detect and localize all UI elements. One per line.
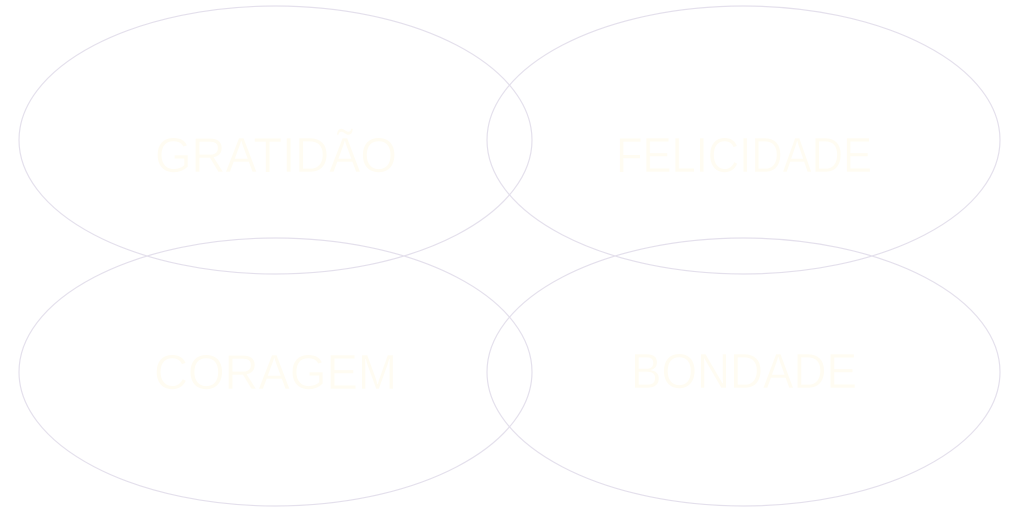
label: coragem: CORAGEM — [154, 346, 397, 400]
ellipse: coragem — [19, 238, 532, 506]
ellipse: bondade — [487, 238, 1000, 506]
label: bondade: BONDADE — [631, 345, 857, 399]
ellipse: gratidão — [19, 6, 532, 274]
label: felicidade: FELICIDADE — [616, 129, 872, 183]
label: gratidão: GRATIDÃO — [155, 129, 397, 183]
ellipse: felicidade — [487, 6, 1000, 274]
